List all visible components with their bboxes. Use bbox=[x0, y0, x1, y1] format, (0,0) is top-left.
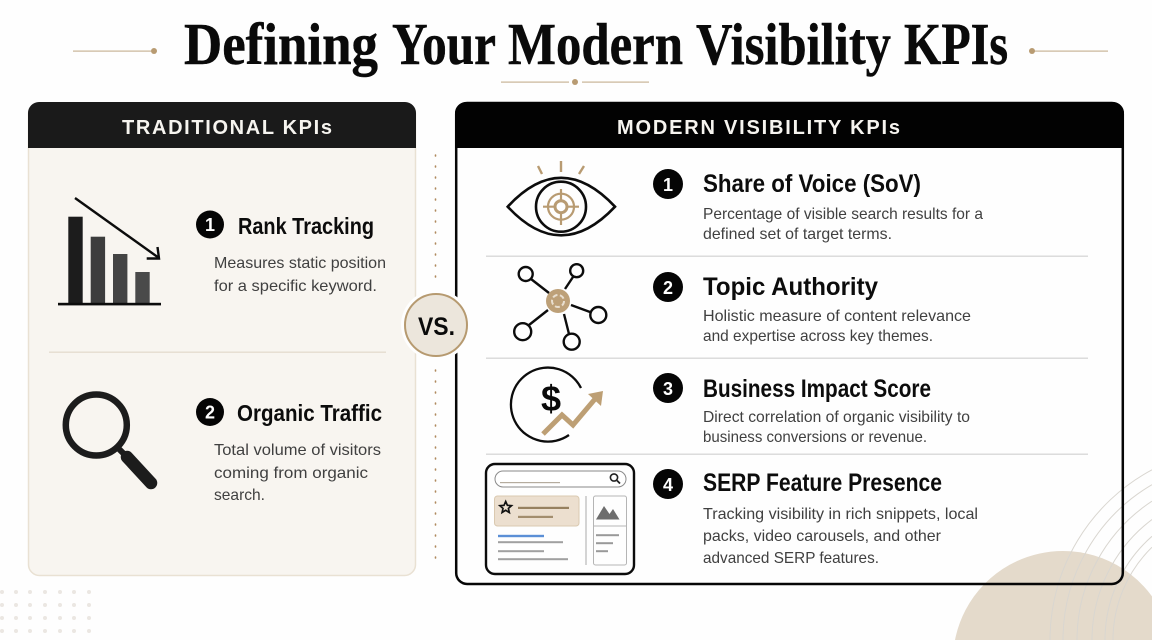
title: Defining bbox=[184, 11, 378, 77]
icon: dollar with growth arrow bbox=[511, 368, 603, 442]
item: share of voice bbox=[653, 169, 983, 243]
item: organic traffic bbox=[196, 398, 382, 504]
item: business impact score: Business Impact Score bbox=[703, 375, 931, 403]
item: rank tracking: for a specific keyword. bbox=[214, 278, 377, 295]
icon: eye with target bbox=[508, 161, 615, 235]
item: topic authority: Topic Authority bbox=[703, 273, 878, 301]
item: organic traffic: 2 bbox=[205, 402, 215, 422]
decorative corner circle and arcs bbox=[955, 470, 1152, 640]
icon: dollar with growth arrow: $ bbox=[541, 378, 561, 419]
item: business impact score: 3 bbox=[663, 379, 673, 399]
item: organic traffic: Total volume of visitors bbox=[214, 442, 381, 459]
item: topic authority: 2 bbox=[663, 278, 673, 298]
traditional header bar bbox=[28, 102, 416, 148]
panel: traditional KPIs bbox=[28, 102, 416, 576]
item: share of voice: 1 bbox=[663, 175, 673, 195]
item: organic traffic: Organic Traffic bbox=[237, 400, 382, 426]
title bbox=[184, 11, 1008, 77]
item: SERP feature presence: Tracking visibility in rich snippets, local bbox=[703, 506, 978, 523]
item: rank tracking: Rank Tracking bbox=[238, 213, 374, 239]
title ornaments bbox=[73, 48, 1108, 85]
item: topic authority: Holistic measure of content relevance bbox=[703, 308, 971, 325]
item: SERP feature presence: 4 bbox=[663, 475, 673, 495]
icon: magnifying glass bbox=[66, 394, 151, 483]
item: business impact score: business conversions or revenue. bbox=[703, 429, 927, 446]
title: KPIs bbox=[904, 11, 1008, 77]
item: business impact score bbox=[653, 373, 970, 446]
item: business impact score: Direct correlation of organic visibility to bbox=[703, 409, 970, 426]
panel: modern visibility KPIs bbox=[455, 102, 1152, 640]
title: Visibility bbox=[696, 11, 891, 77]
item: SERP feature presence: packs, video carousels, and other bbox=[703, 528, 942, 545]
item: organic traffic: search. bbox=[214, 487, 265, 504]
item: rank tracking bbox=[196, 210, 386, 295]
item: topic authority bbox=[653, 272, 971, 345]
modern heading: MODERN VISIBILITY KPIs bbox=[617, 117, 900, 139]
VS badge: VS. bbox=[418, 313, 455, 341]
item: share of voice: Share of Voice (SoV) bbox=[703, 170, 921, 198]
modern header bar bbox=[455, 102, 1124, 148]
item: rank tracking: Measures static position bbox=[214, 255, 386, 272]
title: Your bbox=[392, 11, 496, 77]
item: share of voice: Percentage of visible search results for a bbox=[703, 206, 983, 223]
item: organic traffic: coming from organic bbox=[214, 465, 368, 482]
item: SERP feature presence: SERP Feature Presence bbox=[703, 469, 942, 497]
item: rank tracking: 1 bbox=[205, 215, 215, 235]
icon: SERP page mockup bbox=[486, 464, 634, 574]
icon: declining bar chart bbox=[58, 198, 161, 305]
item: SERP feature presence: advanced SERP features. bbox=[703, 550, 879, 567]
item: SERP feature presence bbox=[653, 469, 978, 567]
item: topic authority: and expertise across key themes. bbox=[703, 328, 933, 345]
decorative dot grid bbox=[0, 590, 91, 633]
item: share of voice: defined set of target terms. bbox=[703, 226, 892, 243]
traditional heading: TRADITIONAL KPIs bbox=[122, 117, 332, 139]
title: Modern bbox=[508, 11, 683, 77]
icon: topic network bbox=[514, 264, 606, 350]
VS badge bbox=[401, 290, 471, 360]
dotted divider bbox=[434, 155, 436, 560]
